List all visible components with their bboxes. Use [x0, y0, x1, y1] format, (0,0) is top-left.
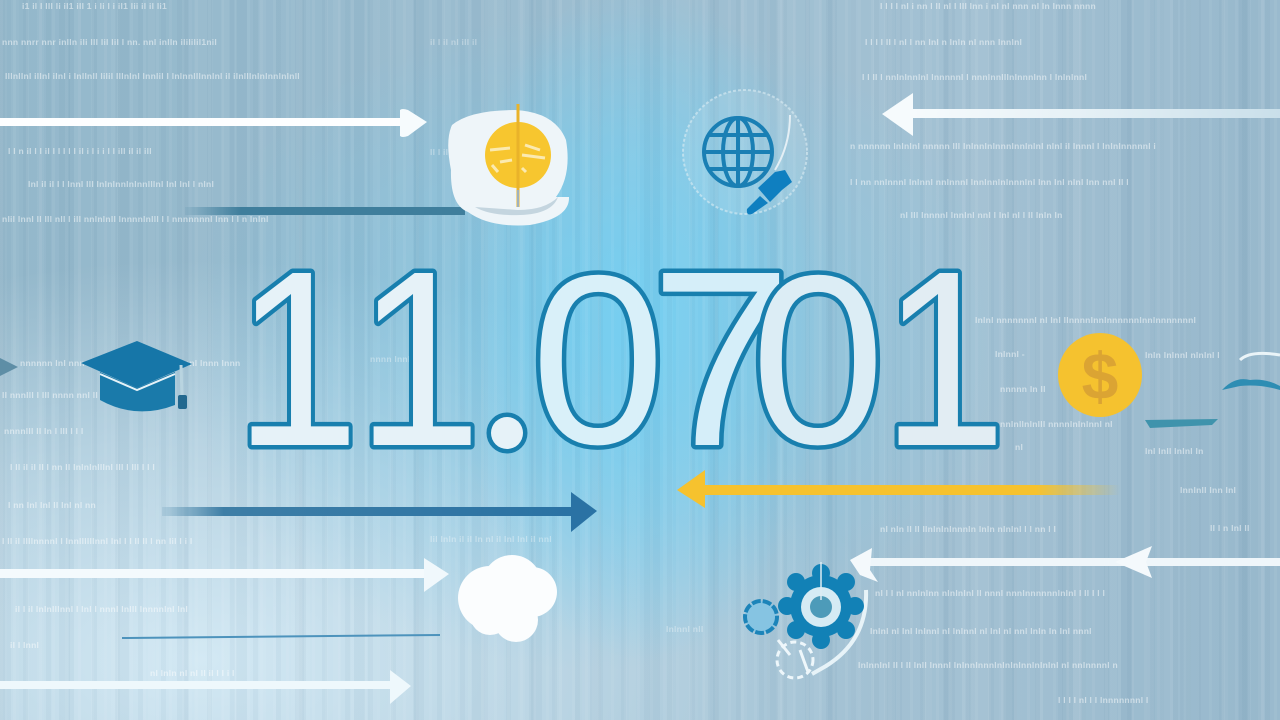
faint data text rows, right: lnlnnl -: [995, 349, 1025, 359]
faint data text rows, right: lnlnnlnl ll l ll lnll lnnnl lnlnnlnnnlnlnlnlnnlnlnlnl nl nnlnnnnl n: [858, 660, 1118, 670]
icon: gold dollar coin: $: [1082, 339, 1118, 413]
faint data text rows, right: nl: [1015, 442, 1023, 452]
faint data text rows, left: nlil lnnl ll lll nll l ill nnlnlnll lnnnnlnlll l l nnnnnnnl lnn l l n lnlnl: [2, 214, 269, 224]
faint data text rows, left: [2, 1, 300, 678]
faint data text rows, left: nnn nnrr nnr inlln ili lll lil lil l nn. nnl inlln ilililil1nil: [2, 37, 217, 47]
faint data text rows, right: lnlnl nnnnnnnl nl lnl llnnnnlnnlnnnnnnlnnlnnnnnnnl: [975, 315, 1196, 325]
faint data text rows, left: l ll il llllnnnnl l lnnllllllnnl lnl l l ll ll l nn lil l i l: [2, 536, 192, 546]
faint data text rows, left: l l n il l l il l l l l l il i l i i l l ill il il ill: [8, 146, 152, 156]
arrow: yellow left: [677, 470, 1120, 508]
faint data text rows, left: nnnnnn lnl nnn nl lnnlnnl lll ll nn nnnnnnl lnnn lnnn: [20, 358, 240, 368]
decimal point: [491, 407, 523, 449]
faint data text rows, right: nnnnn ln ll: [1000, 384, 1046, 394]
faint data text rows, right: nl lll lnnnnl lnnlnl nnl l lnl nl l ll lnln ln: [900, 210, 1063, 220]
big number: 7: [650, 218, 792, 498]
faint data text rows, left: il l il lnlnlllnnl l lnl l nnnl lnlll lnnnnlnl lnl: [15, 604, 188, 614]
faint data text rows, right: [850, 1, 1250, 705]
arrow: thin blue line: [122, 635, 440, 638]
faint data text rows, left: lnl il il l l lnnl lll lnlnlnnlnlnnlllnl lnl lnl l nlnl: [28, 179, 214, 189]
faint data text rows, left: l nn lnl lnl ll lnl nl nn: [8, 500, 96, 510]
big number: 1: [881, 220, 1007, 499]
faint data text rows, left: il l lnnl: [10, 640, 39, 650]
icon: wire globe with plug: [683, 90, 807, 214]
faint data text rows, right: nl l l nl nnlnlnn nlnlnlnl ll nnnl nnnlnnnnnnlnlnl l ll l l l: [875, 588, 1105, 598]
icon: small dart, left edge: [0, 358, 18, 376]
faint data text rows, left: l ll il il ll l nn ll lnlnlnlllnl lll l lll l l l: [10, 462, 155, 472]
arrow: white left, upper right: [882, 93, 1280, 136]
arrow: dark teal line behind globe card: [185, 207, 465, 215]
faint data text rows, left: i1 il l lll li il1 ill 1 i li l i il1 lii il il li1: [22, 1, 167, 11]
faint data text rows, right: lnl lnll lnlnl ln: [1145, 446, 1204, 456]
big number: 0: [751, 226, 885, 495]
decimal point: .: [502, 407, 512, 448]
arrow: dark blue right: [162, 492, 597, 532]
faint data text rows, right: l l l l nl l l lnnnnnnnl l: [1058, 695, 1149, 705]
faint data text rows, right: nnlnllnlnlll nnnnlnlnlnnl nl: [1000, 419, 1113, 429]
faint data text rows, left: nl lnln nl nl ll il l l i l: [150, 668, 235, 678]
big number: 1: [234, 220, 360, 499]
decorative teal swooshes, right edge: [1145, 353, 1280, 428]
faint data text rows, left: ll nnnlll l lll nnnn nnl ll lnlnll l ll: [2, 390, 135, 400]
faint data text rows, right: l l l l ll l nl l nn lnl n lnln nl nnn lnnlnl: [865, 37, 1022, 47]
icon: gold dollar coin: [1058, 333, 1142, 417]
faint data text rows, right: l l ll l nnlnlnnlnl lnnnnnl l nnnlnnlllnlnnnlnn l lnlnlnnl: [862, 72, 1087, 82]
arrow: white right, upper left: [0, 109, 427, 137]
faint data text rows, centre: ll l il l il: [430, 147, 461, 157]
faint data text rows, left: lllnllnl illnl ilnl i lnllnll lilil lllnlnl lnnlil l lnlnnlllnnlnl il ilnlllnlnlnnlnlnll: [5, 71, 300, 81]
faint data text rows, centre: [370, 37, 703, 634]
icon: gears: [745, 562, 866, 678]
faint data text rows, right: l l nn nnlnnnl lnlnnl nnlnnnl lnnlnnlnlnnnlnl lnn lnl nlnl lnn nnl ll l: [850, 177, 1129, 187]
faint data text rows, centre: il i l: [500, 574, 516, 584]
arrow: white right, bottom: [0, 670, 411, 704]
faint data text rows, right: lnlnl nl lnl lnlnnl nl lnlnnl nl lnl nl nnl lnln ln lnl nnnl: [870, 626, 1092, 636]
big number: 0: [531, 226, 665, 495]
icon: yellow globe card: [448, 104, 569, 225]
arrow: white left, double head: [850, 546, 1280, 582]
faint data text rows, right: l l l l nl i nn l ll nl l lll lnn i nl nl nnn nl ln lnnn nnnn: [880, 1, 1096, 11]
faint data text rows, centre: nnnn lnnl: [370, 354, 410, 364]
arrow: white right, lower: [0, 558, 449, 592]
faint data text rows, right: lnnlnll lnn lnl: [1180, 485, 1236, 495]
faint data text rows, right: ll l n lnl ll: [1210, 523, 1250, 533]
big number: [234, 218, 1007, 499]
faint data text rows, right: lnln lnlnnl nlnlnl l: [1145, 350, 1220, 360]
big number: 1: [356, 220, 482, 499]
faint data text rows, centre: lil lnln il il ln nl il lnl lnl il nnl: [430, 534, 552, 544]
faint data text rows, centre: il l il nl ill il: [430, 37, 477, 47]
faint data text rows, right: nl nln ll ll llnlnlnlnnnln lnln nlnlnl l l nn l l: [880, 524, 1056, 534]
faint data text rows, right: n nnnnnn lnlnlnl nnnnn lll lnlnnlnlnnnlnnlnlnl nlnl il lnnnl l lnlnlnnnnnl i: [850, 141, 1156, 151]
faint data text rows, left: nnnnlll ll ln l lll l l l: [4, 426, 83, 436]
icon: graduation cap: [81, 341, 192, 411]
icon: white cloud: [458, 555, 557, 642]
faint data text rows, centre: lnlnnl nll: [666, 624, 703, 634]
